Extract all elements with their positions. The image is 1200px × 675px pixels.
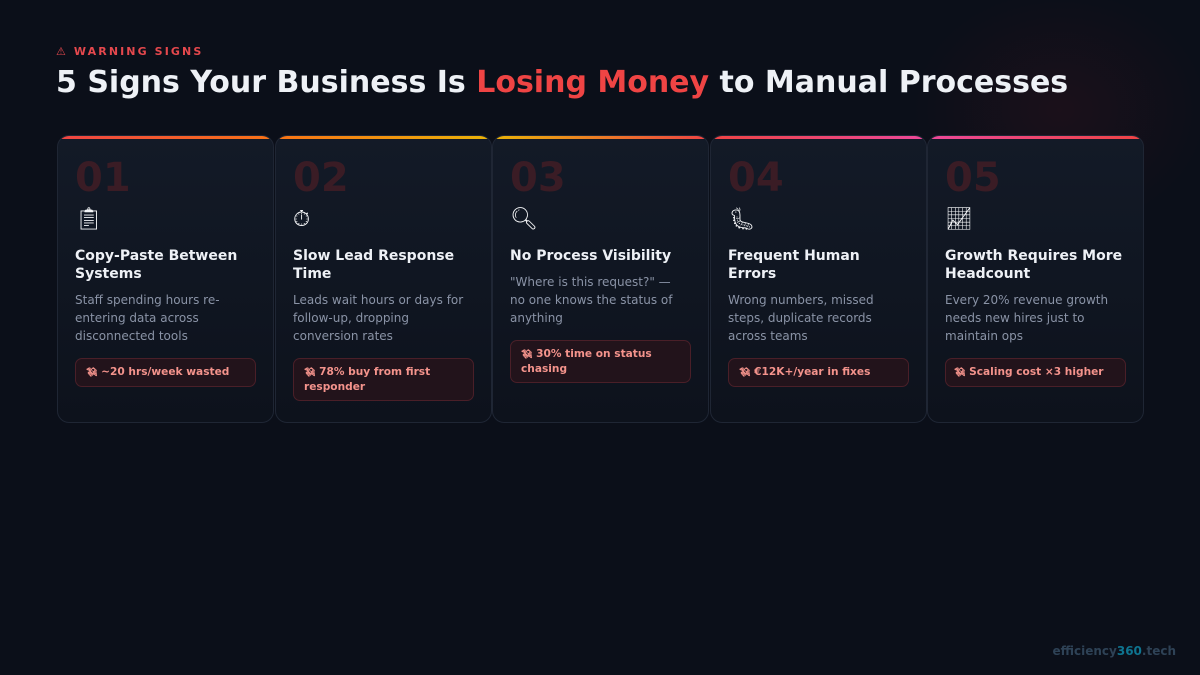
badge: 💸︎ ~20 hrs/week wasted	[86, 366, 229, 378]
icon: magnifier: 🔍︎	[510, 207, 538, 232]
icon: chart: 📈︎	[945, 207, 973, 232]
badge: 💸︎ 30% time on status chasing	[521, 348, 652, 375]
description: Every 20% revenue growth needs new hires just to maintain ops	[945, 293, 1108, 343]
description: "Where is this request?" — no one knows the status of anything	[510, 275, 672, 325]
icon: bug: 🐛︎	[728, 207, 756, 232]
panel: card 2	[275, 135, 492, 423]
heading: Growth Requires More Headcount	[945, 248, 1122, 282]
number: 03	[510, 155, 566, 201]
description: Wrong numbers, missed steps, duplicate records across teams	[728, 293, 874, 343]
heading: No Process Visibility	[510, 248, 671, 264]
panel: card 4	[710, 135, 927, 423]
description: Leads wait hours or days for follow-up, dropping conversion rates	[293, 293, 463, 343]
number: 04	[728, 155, 784, 201]
badge: 💸︎ €12K+/year in fixes	[739, 366, 870, 378]
panel: card 5	[927, 135, 1144, 423]
heading: Copy-Paste Between Systems	[75, 248, 237, 282]
number: 05	[945, 155, 1001, 201]
badge: 💸︎ Scaling cost ×3 higher	[954, 366, 1104, 378]
badge: 💸︎ 78% buy from first responder	[304, 366, 430, 393]
icon: clipboard: 📋︎	[75, 207, 103, 232]
badge	[728, 358, 909, 387]
icon: stopwatch: ⏱︎	[293, 207, 310, 232]
footer brand: efficiency360.tech	[1052, 644, 1176, 658]
badge	[75, 358, 256, 387]
title: 5 Signs Your Business Is Losing Money to Manual Processes	[56, 65, 1068, 100]
badge	[293, 358, 474, 401]
heading: Frequent Human Errors	[728, 248, 860, 282]
number: 01	[75, 155, 131, 201]
kicker: ⚠ WARNING SIGNS	[56, 45, 203, 58]
badge	[510, 340, 691, 383]
panel: card 3	[492, 135, 709, 423]
description: Staff spending hours re-entering data across disconnected tools	[75, 293, 220, 343]
heading: Slow Lead Response Time	[293, 248, 454, 282]
badge	[945, 358, 1126, 387]
panel: card 1	[57, 135, 274, 423]
number: 02	[293, 155, 349, 201]
